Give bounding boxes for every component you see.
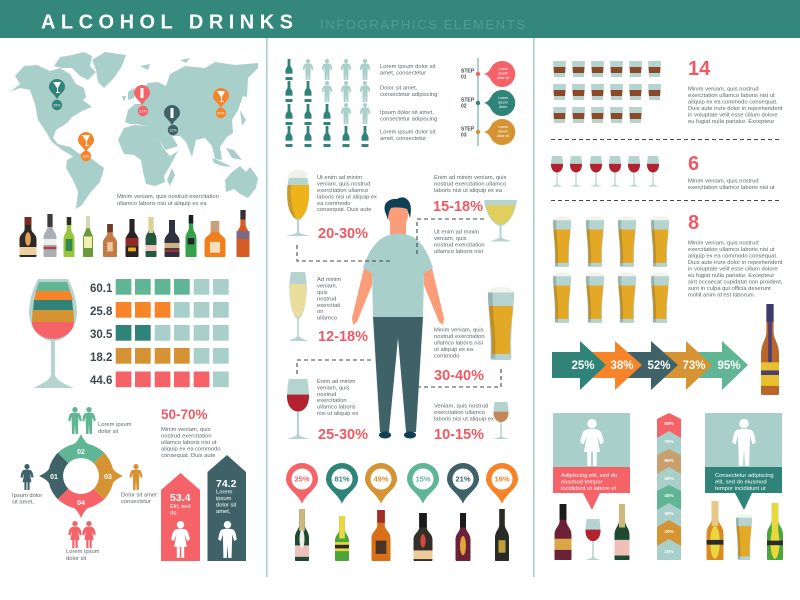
panel: women: Adipiscing elit, sed do — [561, 473, 617, 479]
steps timeline: 03 — [461, 132, 467, 138]
text: 6: Minim veniam, quis nostrud — [688, 178, 759, 184]
text: 8: sunt in culpa qui officia deserunt — [688, 286, 771, 292]
text: 30-40%: nostrud exercitation — [434, 334, 485, 340]
title: ALCOHOL DRINKS — [41, 12, 293, 34]
steps timeline: ipsum — [498, 72, 508, 76]
panel: women: incididunt ut labore et — [561, 486, 616, 492]
percentage pins: 49% — [373, 474, 389, 484]
stat 20-30%: 20-30% — [318, 226, 368, 242]
label top: dolor sit — [98, 429, 119, 435]
tall beer glass — [488, 287, 514, 360]
map caption: ullamco laboris nisi ut aliquip ex ea — [117, 201, 207, 207]
map pin: Europe: 21% — [139, 110, 147, 114]
text: 12-18%: Ad minim — [317, 277, 341, 283]
text: 8: Duis aute irure dolor in reprehenderit — [688, 260, 783, 266]
steps timeline: Lorem — [498, 96, 508, 100]
red wine glass — [287, 379, 309, 439]
stat 6: 6 — [688, 153, 699, 175]
arrow chain: 73% — [682, 360, 706, 372]
ring diagram: 02 — [77, 449, 85, 456]
chevron scale: 50% — [664, 476, 674, 481]
pictogram text: Lorem ipsum dolor sit — [380, 130, 436, 136]
arrow bar: men: amet, — [216, 509, 231, 515]
panel: men: elit, sed do eiusmod — [715, 480, 767, 486]
stat 10-15%: 10-15% — [434, 427, 484, 443]
pictogram text: Lorem ipsum dolor sit — [380, 64, 436, 70]
text: shoulder note: Ut enim ad minim — [434, 230, 479, 236]
text: 8: Minim veniam, quis nostrud — [688, 240, 759, 246]
percentage pins — [286, 463, 518, 504]
steps timeline: dolor sit — [497, 134, 509, 138]
text: 12-18%: exercitati — [317, 303, 340, 309]
arrow chain: 95% — [717, 360, 741, 372]
steps timeline: 02 — [461, 104, 467, 110]
steps timeline — [461, 58, 515, 146]
pictogram text: amet, consectetur — [380, 70, 426, 76]
percentage pins: 21% — [455, 474, 471, 484]
small glass — [493, 402, 509, 439]
pictogram text — [380, 64, 437, 142]
beer goblet — [286, 170, 310, 236]
text: 14: Minim veniam, quis nostrud — [688, 86, 759, 92]
pictogram text: amet, consectetur — [380, 136, 426, 142]
text: 8: eu fugiat nulla pariatur. Excepteur — [688, 273, 774, 279]
text: 14: eu fugiat nulla pariatur. Excepteur — [688, 119, 774, 125]
arrow chain: 38% — [610, 360, 634, 372]
text: shoulder note: veniam, quis — [434, 236, 467, 242]
arrow bar: women: do — [170, 510, 176, 516]
value labels — [90, 283, 113, 387]
text: 14: in voluptate velit esse cillum dolore — [688, 112, 778, 118]
stat text: Minim veniam, quis — [161, 427, 211, 433]
text: 12-18%: nostrud — [317, 296, 336, 302]
column divider right — [533, 38, 535, 577]
ring diagram: 04 — [77, 500, 85, 507]
map caption: Minim veniam, quis nostrud exercitation — [117, 194, 219, 200]
arrow chain — [552, 341, 748, 390]
text: 20-30%: consequat. Duis aute — [317, 207, 371, 213]
stat text: nostrud exercitation — [161, 434, 212, 440]
text: 8: sint occaecat cupidatat non proident, — [688, 280, 783, 286]
subtitle: INFOGRAPHICS ELEMENTS — [320, 17, 525, 32]
arrow bar: men: 74.2 — [216, 478, 237, 490]
steps timeline: dolor sit — [497, 76, 509, 80]
bottle row — [20, 210, 250, 257]
label right: consectetur — [121, 499, 151, 505]
text: 8: aliquip ex ea commodo consequat. — [688, 254, 778, 260]
dashed connector: tall beer — [418, 369, 501, 387]
text: 20-30%: veniam, quis nostrud — [317, 182, 370, 188]
text: 15-18%: nostrud exercitation ullamco — [434, 182, 506, 188]
steps timeline: STEP — [461, 126, 475, 132]
text: 10-15%: Veniam, quis nostrud — [434, 404, 488, 410]
text: 14: exercitation ullamco laboris nisi ut — [688, 93, 775, 99]
ring diagram: 03 — [104, 474, 112, 481]
dashed connector: coupe — [417, 219, 484, 257]
text: 15-18%: laboris nisi ut aliquip ex ea — [434, 188, 503, 194]
shot glasses — [553, 61, 661, 123]
stat 30-40%: 30-40% — [434, 368, 484, 384]
arrow bar: women: 53.4 — [170, 492, 191, 504]
text: 14: Duis aute irure dolor in reprehenderit — [688, 106, 783, 112]
dashed connector: beer — [297, 245, 390, 261]
text: 10-15%: laboris nisi ut aliquip ex — [434, 416, 494, 422]
steps timeline: Lorem — [498, 67, 508, 71]
stat 12-18%: 12-18% — [318, 329, 368, 345]
arrow bar: men: Lorem — [216, 490, 233, 496]
label bottom: Lorem ipsum — [66, 549, 100, 555]
text: 20-30%: laboris nisi ut aliquip ex — [317, 194, 377, 200]
label right: Dolor sit amet — [121, 492, 157, 498]
icon: gold man — [130, 464, 142, 490]
people icons: green men — [68, 407, 96, 434]
square grid chart — [116, 279, 229, 387]
arrow bar: men: dolor sit — [216, 502, 237, 508]
stat 50-70%: 50-70% — [161, 407, 208, 422]
map pin: China — [213, 88, 229, 118]
stat 8: 8 — [688, 212, 699, 234]
pictogram text: Dolor sit amet, — [380, 86, 418, 92]
text: 8: mollit anim id est laborum. — [688, 292, 756, 298]
pictogram text: consectetur adipiscing — [380, 116, 437, 122]
value labels: 44.6 — [90, 375, 112, 387]
icon: dark woman — [20, 464, 34, 490]
arrow bar: women: Elit, sed — [170, 504, 191, 510]
chevron scale: 70% — [664, 439, 674, 444]
chevron scale: 80% — [664, 421, 674, 426]
arrow chain: 25% — [571, 360, 595, 372]
stat 14: 14 — [688, 58, 711, 80]
text: 12-18%: quis — [317, 290, 328, 296]
bottom right drinks — [706, 501, 783, 560]
central figure — [352, 197, 444, 438]
pictogram grid — [286, 59, 370, 147]
text: 20-30%: ea commodo — [317, 201, 351, 207]
panel: men: tempor incididunt ut — [715, 486, 766, 492]
panel: women: eiusmod tempor — [561, 480, 603, 486]
coupe glass — [484, 200, 517, 242]
large brown bottle — [761, 304, 779, 395]
wine glasses — [551, 156, 659, 186]
panel: men: Consectetur adipiscing — [715, 473, 774, 479]
text: shoulder note: ullamco laboris nisi — [434, 249, 483, 255]
steps timeline: dolor — [499, 105, 508, 109]
label top: Lorem ipsum — [98, 422, 132, 428]
panel: men — [705, 413, 782, 510]
steps timeline: ipsum — [498, 130, 508, 134]
text: 25-30%: nisi ut aliquip ex — [317, 411, 358, 417]
arrow bar: men: ipsum — [216, 496, 232, 502]
steps timeline: Lorem — [498, 125, 508, 129]
text: 12-18%: ullamco — [317, 316, 337, 322]
chevron scale — [657, 413, 681, 560]
text: 20-30%: Ut enim ad minim — [317, 175, 362, 181]
pictogram text: consectetur adipiscing — [380, 92, 437, 98]
text: 6: exercitation ullamco laboris nisi ut — [688, 185, 775, 191]
chevron scale: 20% — [664, 529, 674, 534]
steps timeline: 01 — [461, 74, 467, 80]
text: 12-18%: on — [317, 309, 323, 315]
bottom left drinks — [554, 504, 630, 560]
panel: women — [553, 413, 630, 510]
pictogram text: Ipsum dolor sit amet, — [380, 110, 434, 116]
value labels: 60.1 — [90, 283, 113, 295]
text: shoulder note: nostrud exercitation — [434, 242, 485, 248]
text: 20-30%: exercitation ullamco — [317, 188, 368, 194]
arrow chain: 52% — [647, 360, 671, 372]
steps timeline: STEP — [461, 68, 475, 74]
flute glass — [289, 272, 307, 341]
map pin: Asia — [164, 105, 180, 135]
arrow bar: women — [161, 473, 200, 561]
percentage pins: 19% — [494, 474, 510, 484]
stat text: aliquip ex ea commodo — [161, 446, 221, 452]
steps timeline: ipsum — [498, 100, 508, 104]
text: 14: aliquip ex ea commodo consequat. — [688, 100, 778, 106]
percentage pins: 81% — [334, 474, 350, 484]
text: 8: exercitation ullamco laboris nisi ut — [688, 247, 775, 253]
text: 25-30%: nostrud — [317, 392, 336, 398]
layered wine glass — [29, 279, 77, 388]
map pin: South America — [78, 132, 94, 161]
ring diagram — [39, 434, 123, 518]
stat text: consequat. Duis aute — [161, 453, 215, 459]
text: 30-40%: commodo — [434, 354, 459, 360]
text: 30-40%: ut aliquip ex ea — [434, 347, 474, 353]
text: 8: in voluptate velit esse cillum dolore — [688, 266, 778, 272]
percentage pins: 15% — [415, 474, 431, 484]
text: 30-40%: Minim veniam, quis — [434, 328, 484, 334]
header band — [0, 0, 800, 38]
map pin: Europe — [134, 85, 150, 116]
beer glasses — [553, 216, 669, 323]
value labels: 25.8 — [90, 306, 113, 318]
percentage pins: 25% — [294, 474, 310, 484]
chevron scale: 60% — [664, 458, 674, 463]
arrow bar: men — [208, 455, 246, 561]
stat 25-30%: 25-30% — [318, 427, 368, 443]
stat text: ullamco laboris nisi ut — [161, 440, 217, 446]
ring diagram: 01 — [50, 474, 58, 481]
stat 15-18%: 15-18% — [433, 199, 483, 215]
map pin: China: 60% — [217, 112, 225, 116]
value labels: 30.5 — [90, 329, 113, 341]
text: 30-40%: ullamco laboris nisi — [434, 340, 483, 346]
text: 15-18%: Enim ad minim veniam, quis — [434, 175, 507, 181]
text: 25-30%: Enim ad minim — [317, 379, 356, 385]
steps timeline: STEP — [461, 98, 475, 104]
text: 25-30%: exercitation — [317, 398, 347, 404]
column divider left — [266, 38, 268, 577]
label left: sit amet, — [12, 500, 34, 506]
map pin: South America: 15% — [82, 154, 90, 158]
map pin: North America — [49, 79, 65, 110]
text: 25-30%: ullamco laboris — [317, 404, 356, 410]
label bottom: dolor sit — [66, 556, 87, 562]
map pin: North America: 25% — [53, 104, 61, 108]
text: 12-18%: veniam, — [317, 284, 338, 290]
text: 10-15%: exercitation ullamco — [434, 410, 485, 416]
world map — [10, 52, 258, 209]
chevron scale: 40% — [664, 493, 674, 498]
chevron scale: 30% — [664, 511, 674, 516]
bottles under pins — [295, 509, 509, 561]
value labels: 18.2 — [90, 352, 112, 364]
label left: Ipsum dolor — [12, 493, 42, 499]
text: 25-30%: veniam, quis — [317, 386, 350, 392]
dashed connector: wine — [297, 360, 373, 374]
chevron scale: 10% — [664, 549, 674, 554]
people icons: red women — [68, 521, 96, 548]
map pin: Asia: 12% — [169, 128, 177, 132]
